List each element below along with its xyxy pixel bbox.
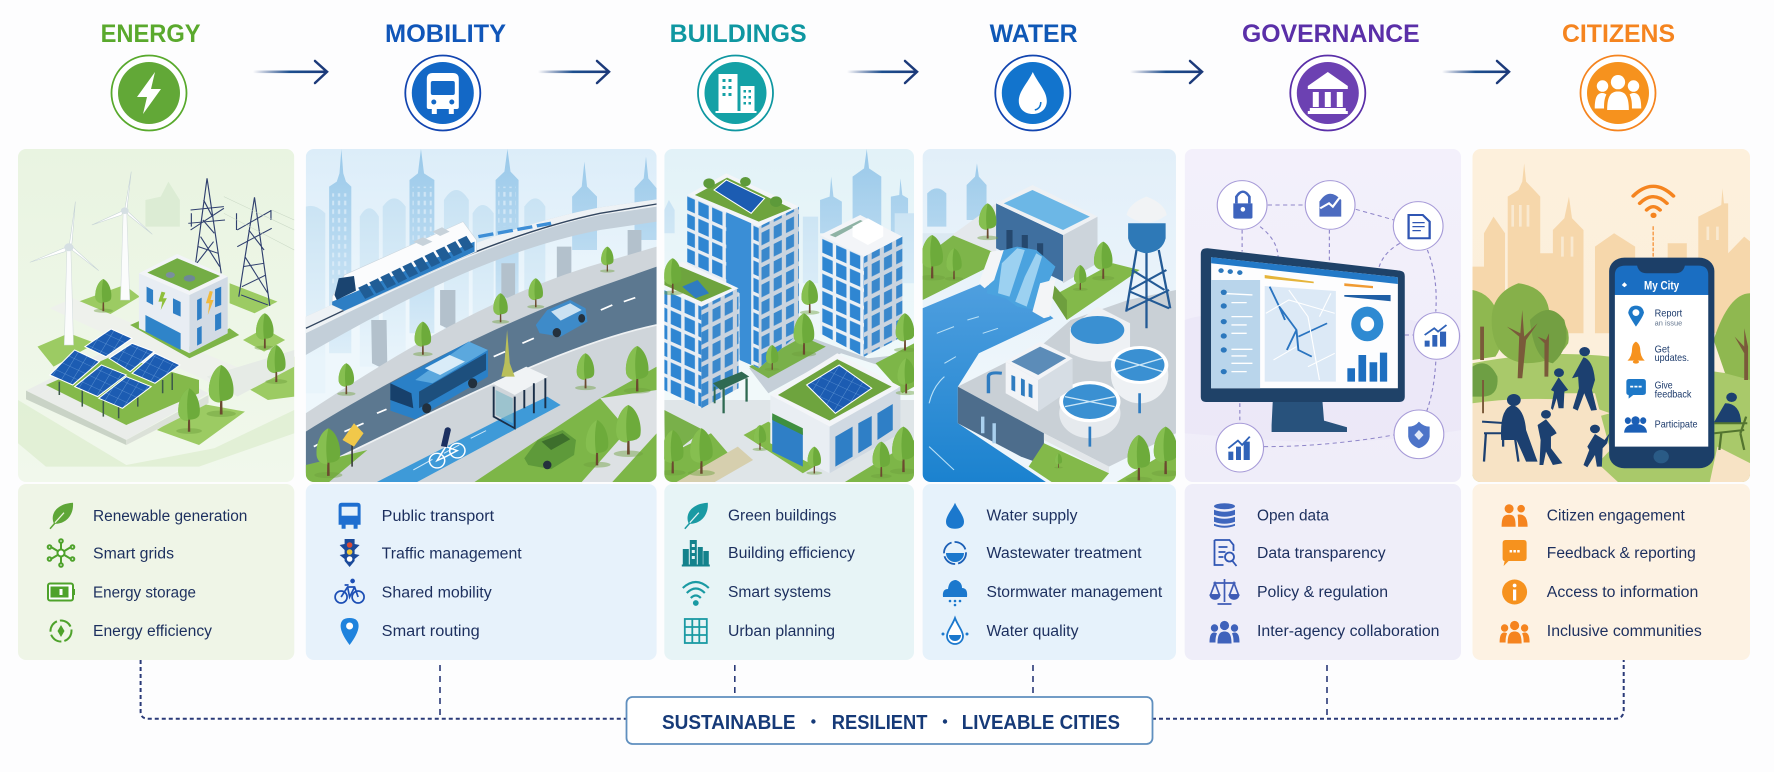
icon: people [1210, 621, 1240, 644]
heading: GOVERNANCE: GOVERNANCE [1242, 20, 1420, 48]
green car [524, 430, 576, 469]
panel: energy list: Smart grids [93, 546, 174, 562]
icon: buildings [682, 540, 710, 566]
wind turbine 2 [92, 172, 152, 300]
node: chart right [1414, 313, 1459, 359]
monitor [1201, 248, 1405, 432]
panel: citizens list [1472, 484, 1750, 660]
smartphone [1609, 258, 1714, 468]
panel: water list: Water supply [986, 508, 1078, 524]
app row: report: an issue [1655, 319, 1683, 327]
heading: ENERGY: ENERGY [101, 20, 201, 48]
icon: chat [1503, 540, 1527, 566]
icon: traffic light [340, 539, 360, 567]
wind turbine 1 [30, 202, 99, 345]
panel: water list: Stormwater management [986, 584, 1163, 601]
treatment platform [958, 290, 1176, 473]
panel: energy list: Renewable generation [93, 508, 247, 525]
cyclist [429, 427, 465, 468]
control building [139, 254, 228, 353]
panel: buildings list: Smart systems [728, 584, 831, 601]
panel: energy list: Energy storage [93, 584, 196, 602]
river [923, 283, 1053, 482]
node: analytics [1305, 181, 1355, 229]
connector lines to outcome banner [141, 660, 1624, 719]
app row: participate: Participate [1655, 420, 1698, 430]
outcome banner [626, 697, 1152, 744]
elevated rail viaduct [306, 199, 657, 355]
panel: energy list: Energy efficiency [93, 623, 212, 640]
icon: community [1500, 621, 1530, 644]
panel: governance list: Inter-agency collaboration [1257, 623, 1440, 640]
lower left building [664, 262, 739, 408]
panel: citizens list: Citizen engagement [1547, 508, 1685, 524]
panel: water list [923, 484, 1176, 660]
icon: drop [946, 503, 964, 529]
icon: leaf [50, 503, 73, 529]
heading: MOBILITY: MOBILITY [385, 20, 506, 48]
icon: wifi [683, 582, 709, 605]
pylons [188, 178, 272, 306]
green shelter [713, 372, 749, 413]
park ground [1473, 354, 1750, 482]
train [332, 222, 476, 311]
smartphone: My City [1644, 278, 1680, 292]
pillars [371, 230, 641, 367]
app row: updates: Get [1655, 345, 1670, 355]
icon: citizens badge [1580, 56, 1656, 130]
roads and ground [306, 247, 657, 482]
silhouettes of citizens [1482, 347, 1741, 467]
panel: buildings list: Building efficiency [728, 545, 855, 562]
icon: scales [1210, 579, 1238, 604]
park trees [1473, 283, 1750, 413]
outcome banner: RESILIENT [832, 712, 927, 734]
panel: water list: Wastewater treatment [986, 545, 1142, 562]
app row: feedback: feedback [1655, 390, 1692, 400]
low green-roof building [770, 353, 900, 473]
arrow 2 [538, 61, 609, 83]
panel: governance list [1185, 484, 1461, 660]
panel: mobility list: Public transport [382, 508, 495, 525]
panel: buildings list: Green buildings [728, 508, 837, 524]
heading: CITIZENS: CITIZENS [1562, 20, 1675, 48]
panel: citizens list: Access to information [1547, 584, 1698, 601]
icon: document search [1214, 540, 1236, 566]
solar array [50, 329, 180, 418]
panel: governance list: Data transparency [1257, 545, 1386, 562]
app row: updates: updates. [1655, 354, 1689, 364]
water tower [1126, 197, 1170, 328]
app row: feedback: Give [1655, 381, 1673, 391]
app row: participate [1624, 416, 1698, 433]
panel: energy illustration [18, 149, 294, 482]
icon: wastewater [944, 542, 966, 564]
panel: buildings illustration [660, 149, 917, 482]
panel: governance list: Policy & regulation [1257, 584, 1388, 601]
icon: bus [339, 503, 361, 529]
panel: water illustration [919, 149, 1180, 483]
arrow 1 [253, 61, 327, 83]
panel: mobility list: Shared mobility [382, 584, 492, 602]
app row: report [1628, 306, 1683, 327]
icon: two people [1502, 504, 1528, 527]
icon: battery [48, 584, 75, 600]
panel: mobility list [306, 484, 657, 660]
icon: efficiency [50, 620, 72, 642]
node: chart left [1216, 423, 1264, 472]
icon: leaf [685, 503, 708, 529]
icon: pin [341, 618, 359, 645]
panel: energy list [18, 484, 294, 660]
bus [390, 342, 488, 419]
green bank and dam [979, 185, 1140, 320]
icon: bicycle [335, 580, 364, 603]
node: document [1393, 202, 1443, 250]
heading: WATER: WATER [990, 20, 1078, 48]
wifi signal [1633, 186, 1673, 257]
icon: buildings badge [698, 56, 773, 130]
settling tanks [1059, 307, 1168, 447]
icon: energy bolt badge [112, 56, 186, 130]
icon: smart grid [48, 539, 74, 567]
pump house [988, 342, 1073, 412]
icon: grid [685, 619, 707, 643]
icon: mobility bus badge [405, 56, 480, 130]
outcome banner: LIVEABLE CITIES [962, 712, 1120, 734]
node: shield [1394, 410, 1444, 459]
app row: updates [1627, 342, 1689, 364]
icon: water drop badge [995, 56, 1070, 130]
panel: citizens list: Feedback & reporting [1547, 545, 1696, 562]
panel: buildings list [664, 484, 914, 660]
arrow 4 [1130, 61, 1202, 83]
panel: citizens list: Inclusive communities [1547, 623, 1702, 640]
panel: water list: Water quality [986, 623, 1079, 640]
right tower [820, 215, 902, 357]
panel: mobility illustration [306, 149, 657, 482]
outcome banner: SUSTAINABLE [662, 712, 796, 734]
app row: report: Report [1655, 309, 1682, 319]
panel: governance illustration [1185, 149, 1461, 482]
app row: feedback [1626, 379, 1692, 400]
arrow 3 [847, 61, 917, 83]
panel: mobility list: Traffic management [382, 546, 522, 562]
panel: citizens illustration [1473, 149, 1750, 482]
panel: buildings list: Urban planning [728, 623, 835, 640]
heading: BUILDINGS: BUILDINGS [670, 20, 807, 48]
icon: info [1502, 580, 1527, 604]
node: lock [1217, 181, 1267, 229]
bus shelter [492, 367, 548, 428]
icon: water quality [942, 618, 968, 644]
tall tower [687, 173, 799, 368]
panel: governance list: Open data [1257, 508, 1329, 524]
arrow 5 [1442, 61, 1509, 83]
dashed network links [1240, 205, 1436, 447]
icon: database [1214, 503, 1235, 528]
icon: storm cloud [943, 580, 967, 606]
panel: mobility list: Smart routing [382, 623, 480, 640]
blue car [536, 300, 587, 337]
icon: governance badge [1290, 56, 1365, 130]
